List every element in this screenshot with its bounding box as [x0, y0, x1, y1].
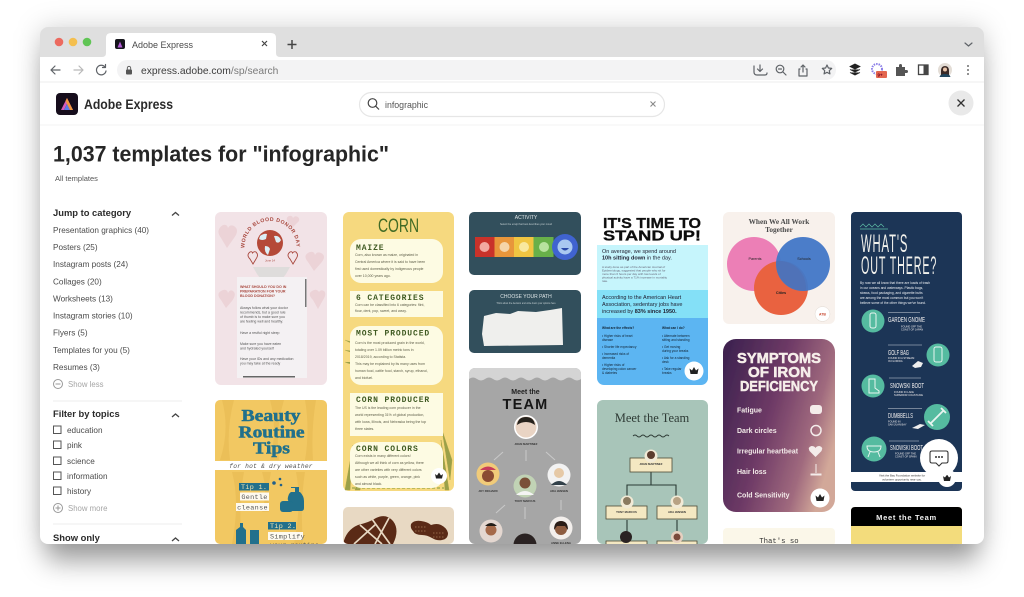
section: effects and actions: dementia: [602, 356, 615, 360]
curved title: [244, 221, 296, 252]
symptom list: [737, 405, 822, 500]
section: effects and actions: • Increased risks of: [602, 352, 629, 356]
white instruction panel: Make sure you have eaten: [240, 342, 281, 346]
venn circles: Schools: [797, 257, 811, 261]
card: meet the team grey: Meet the: [511, 389, 540, 396]
symptom list: Fatigue: [737, 408, 762, 414]
corn producer section: CORN PRODUCER: [356, 396, 430, 405]
categories section: Corn can be classified into 6 categories: flint,: [355, 303, 424, 307]
maize section: Central America where it is said to have been: [355, 260, 425, 264]
card: what's out there: [851, 212, 962, 491]
app header: [40, 90, 984, 126]
card: activity chalkboard: ACTIVITY: [515, 215, 538, 221]
section: effects and actions: disease: [602, 338, 613, 342]
maize section: first used domestically by indigenous people: [355, 267, 424, 271]
card: that's so: That's so: [759, 538, 799, 546]
filter by topics: pink: [67, 441, 83, 450]
section: sitting: more than 6 hours per day with low levels of: [602, 272, 661, 276]
june date: June 14: [265, 258, 275, 262]
corn producer section: with Iowa, Illinois, and Nebraska being the top: [355, 420, 426, 424]
white instruction panel: Have your IDs and any medication: [240, 357, 294, 361]
card: symptoms of iron deficiency: SYMPTOMS: [737, 351, 821, 367]
breadcrumb: All templates: [55, 174, 98, 183]
headline: WHAT'S: [861, 230, 908, 258]
found item list: SNOWSKI BOOT: [890, 443, 923, 452]
address bar: express.adobe.com/sp/search: [141, 66, 279, 77]
org chart: ADA JENSEN: [668, 510, 686, 514]
white instruction panel: are feeling well and healthy.: [240, 320, 283, 324]
filter by topics: [53, 408, 179, 513]
card: corn: [343, 212, 454, 491]
tip one: Tip 1.: [241, 484, 267, 492]
white instruction panel: of thumb is to make sure you: [240, 315, 285, 319]
section: sedentary jobs: increased by 83% since 1950.: [602, 309, 677, 315]
section: effects and actions: desk: [662, 360, 669, 364]
address bar: [117, 60, 836, 80]
found item list: FOUND OFF THE: [901, 324, 922, 328]
section: effects and actions: • Get moving: [662, 345, 681, 349]
jump to category: Jump to category: [53, 207, 132, 218]
found item list: FOUND IN A STREAM: [888, 356, 914, 360]
categories section: 6 CATEGORIES: [356, 294, 424, 303]
section: effects and actions: [597, 318, 708, 385]
found item list: COAST OF SPAIN: [895, 454, 917, 458]
found item list: FOUND OFF THE: [895, 452, 916, 456]
active tab: Adobe Express: [132, 40, 194, 50]
found item list: GARDEN GNOME: [888, 315, 925, 324]
most produced section: [350, 326, 443, 385]
most produced section: totaling over 1.09 billion metric tons in: [355, 348, 414, 352]
tip two: your routine: [270, 542, 319, 550]
org chart people: JOY RICHARD: [478, 489, 498, 493]
section: effects and actions: What can I do?: [662, 326, 685, 330]
show only: Show only: [53, 532, 101, 543]
most produced section: MOST PRODUCED: [356, 330, 430, 338]
categories section: flour, dent, pop, sweet, and waxy.: [355, 309, 407, 313]
forward button: [74, 66, 83, 74]
corn title: CORN: [378, 216, 419, 237]
venn circles: Parents: [748, 257, 762, 261]
tip one: Gentle: [241, 494, 268, 502]
card: choose your path: Think about the decision and write down your options here: [496, 302, 556, 305]
white instruction panel: [237, 277, 307, 378]
section: sedentary jobs: Association, sedentary jobs have: [602, 302, 682, 308]
found item list: DUMBBELLS: [888, 411, 913, 420]
card: meet the team black header: Meet the Team: [876, 513, 937, 522]
jump to category: Presentation graphics (40): [53, 226, 149, 235]
toolbar icons: 9+: [878, 72, 883, 78]
premium badge: [810, 488, 830, 508]
found item list: GOLF BAG: [888, 348, 909, 357]
logo stamp: ATB: [819, 312, 826, 316]
card: symptoms of iron deficiency: DEFICIENCY: [740, 379, 818, 395]
section: sitting: Epidemiology, suggested that people who sit for: [602, 268, 665, 272]
found item list: SAN JUAN BAY: [888, 422, 907, 426]
found item list: FOUND IN LAKE: [894, 390, 914, 394]
org chart people: ANNE ELLENA: [551, 541, 571, 545]
sidebar filters: [53, 207, 182, 543]
card: choose your path: CHOOSE YOUR PATH: [500, 294, 552, 300]
card: symptoms of iron deficiency: [723, 339, 835, 512]
tip one: [236, 478, 304, 512]
card: meet the team grey: [469, 368, 581, 556]
found item list: IN FLORIDA: [888, 359, 903, 363]
template grid: [215, 212, 962, 544]
white instruction panel: PREPARATION FOR YOUR: [240, 290, 286, 294]
org chart people: [476, 415, 572, 556]
found item list: COAST OF JAPAN: [901, 328, 923, 332]
title: Tips: [253, 438, 291, 458]
card: world blood donor day: WORLD BLOOD DONOR DAY: [240, 217, 300, 248]
org chart people: ADA JENSEN: [550, 489, 568, 493]
filter by topics: information: [67, 472, 108, 481]
found item list: [862, 310, 950, 462]
section: effects and actions: • Alternate between: [662, 334, 690, 338]
premium badge: [938, 469, 956, 487]
browser toolbar: [40, 60, 984, 82]
white instruction panel: BLOOD DONATION?: [240, 294, 275, 298]
section: effects and actions: during your breaks: [662, 349, 689, 353]
section: effects and actions: • Higher risks of: [602, 363, 624, 367]
card: choose your path: [469, 290, 581, 353]
premium badge: [684, 362, 704, 380]
card: beauty routine tips: [215, 400, 327, 550]
org chart people: JOHN MARTINEZ: [514, 442, 538, 446]
section: sitting: rate.: [602, 279, 608, 283]
jump to category: [53, 207, 179, 389]
footer band: [851, 472, 962, 482]
section: sitting: 10h sitting down in the day.: [602, 256, 672, 262]
maize section: Corn, also known as maize, originated in: [355, 253, 418, 257]
most produced section: Corn is the most produced grain in the world,: [355, 341, 425, 345]
found item list: SUPERIOR COASTLINE: [894, 393, 923, 397]
jump to category: Resumes (3): [53, 363, 100, 372]
subtitle band: [215, 461, 327, 470]
tip one: cleanse: [237, 504, 268, 512]
card: it's time to stand up: STAND UP!: [603, 228, 701, 244]
org chart: JOHN MARTINEZ: [640, 462, 663, 466]
reload button: [96, 64, 106, 75]
card: what's out there: By now we all know that there are loads of trash: [860, 281, 930, 285]
card: what's out there: straws, food packaging, and cigarette butts: [860, 291, 923, 295]
corn colors section: Corn exists in many different colors!: [355, 454, 411, 458]
most produced section: and biofuel.: [355, 376, 373, 380]
headline: [861, 230, 937, 280]
card: what's out there: in our oceans and waterways. Plastic bags,: [860, 286, 923, 290]
maize section: [350, 239, 443, 283]
symptom list: Hair loss: [737, 469, 767, 476]
card: venn diagram: Together: [765, 225, 794, 234]
tab list chevron: [965, 43, 972, 46]
white instruction panel: Always follow what your doctor: [240, 306, 289, 310]
section: sitting: On average, we spend around: [602, 249, 676, 255]
corn colors section: such as white, purple, green, orange, pink: [355, 475, 420, 479]
globe: [257, 230, 283, 256]
section: sitting: [597, 245, 708, 290]
section: effects and actions: • Ask for a standing: [662, 356, 690, 360]
headline: OUT THERE?: [861, 253, 937, 280]
active tab: [102, 33, 280, 57]
window controls: [55, 38, 91, 46]
card: symptoms of iron deficiency: OF IRON: [748, 365, 811, 381]
jump to category: Templates for you (5): [53, 346, 130, 355]
corn producer section: world representing 31% of global production,: [355, 413, 424, 417]
section: sitting: A study done as part of the American Journal of: [602, 265, 665, 269]
jump to category: Flyers (5): [53, 328, 88, 338]
corn colors section: [350, 442, 443, 488]
card: activity chalkboard: Select the emoji that best describes your mood: [500, 223, 553, 226]
search box: [360, 92, 664, 116]
tip two: Simplify: [270, 534, 305, 542]
page heading: 1,037 templates for "infographic": [53, 142, 389, 166]
corn producer section: three states.: [355, 427, 374, 431]
section: sedentary jobs: [597, 290, 708, 318]
card: meet the team black header: [851, 507, 962, 547]
jump to category: Collages (20): [53, 278, 102, 286]
tip two: Tip 2.: [270, 523, 296, 531]
filter by topics: education: [67, 426, 103, 435]
venn circles: Cities: [776, 291, 786, 295]
section: sedentary jobs: According to the American Heart: [602, 295, 682, 301]
found item list: SNOWSKI BOOT: [890, 381, 924, 390]
card: venn diagram: [723, 212, 835, 324]
card: peanut: [343, 507, 454, 544]
card: what's out there: are among the most common but you won't: [860, 296, 923, 300]
symptom list: Irregular heartbeat: [737, 448, 799, 456]
brand name: Adobe Express: [84, 96, 173, 112]
section: effects and actions: breaks: [662, 371, 672, 375]
card: world blood donor day: [215, 212, 327, 385]
section: effects and actions: • Take regular: [662, 367, 682, 371]
filter by topics: science: [67, 457, 95, 466]
toolbar icons: [754, 63, 969, 78]
white instruction panel: and hydrated yourself: [240, 346, 274, 350]
corn producer section: The US is the leading corn producer in the: [355, 406, 421, 410]
white instruction panel: WHAT SHOULD YOU DO IN: [240, 285, 287, 289]
filter by topics: Show more: [68, 504, 107, 513]
corn colors section: are other varieties with very different colors: [355, 468, 422, 472]
jump to category: Worksheets (13): [53, 294, 113, 304]
corn colors section: CORN COLORS: [356, 445, 419, 454]
section: effects and actions: • Higher risks of heart: [602, 334, 633, 338]
section: effects and actions: sitting and standing: [662, 338, 690, 342]
corn colors section: Although we all think of corn as yellow, there: [355, 461, 424, 465]
org chart people: TONY MARCUS: [515, 499, 535, 503]
white instruction panel: Have a restful night sleep: [240, 331, 280, 335]
org chart: TONY MARCUS: [616, 510, 637, 514]
venn circles: [727, 237, 830, 315]
section: effects and actions: What are the effects?: [602, 326, 634, 330]
close button: [948, 90, 974, 116]
card: it's time to stand up: [597, 212, 708, 385]
torn paper: [482, 308, 563, 346]
card: what's out there: believe some of the other things we've found.: [860, 301, 926, 305]
categories section: [350, 291, 443, 317]
section: effects and actions: • Shorter life expectancy: [602, 345, 637, 349]
jump to category: Posters (25): [53, 243, 98, 252]
tip two: [236, 522, 318, 544]
corn producer section: [350, 393, 443, 436]
card: meet the team grey: TEAM: [503, 397, 548, 413]
org chart: [606, 450, 697, 549]
title: Routine: [238, 422, 304, 442]
most produced section: 2018/2019, according to Statista.: [355, 355, 406, 359]
card: meet the team green: Meet the Team: [615, 411, 690, 425]
maize section: over 10,000 years ago.: [355, 274, 391, 278]
footer band: volunteer opportunity near you.: [882, 478, 922, 482]
search box: infographic: [385, 100, 429, 110]
white instruction panel: you may take at the ready: [240, 362, 281, 366]
card: it's time to stand up: IT'S TIME TO: [603, 216, 701, 232]
card: that's so: [723, 528, 835, 546]
card: activity chalkboard: [469, 212, 581, 275]
Adobe Express logo: [56, 93, 78, 115]
jump to category: Instagram posts (24): [53, 260, 128, 269]
premium badge: [431, 468, 447, 484]
corn colors section: and almost black.: [355, 482, 382, 486]
symptom list: Dark circles: [737, 428, 777, 435]
heart icons: [248, 252, 298, 264]
most produced section: This may be explained by its many uses from: [355, 362, 425, 366]
maize section: MAIZE: [356, 244, 385, 253]
tab strip: [40, 27, 984, 57]
back button: [51, 66, 60, 74]
title: Beauty: [242, 406, 301, 425]
mood scale: [475, 234, 578, 260]
section: sitting: physical activity have a 71% increase in mortality: [602, 276, 668, 280]
new tab button: [288, 40, 296, 49]
card: venn diagram: When We All Work: [749, 217, 810, 226]
most produced section: human food, cattle food, starch, syrup, ethanol,: [355, 369, 428, 373]
footer band: Visit the Bay Foundation website for: [879, 474, 925, 478]
section: effects and actions: developing colon cancer: [602, 367, 637, 371]
card: meet the team green: [597, 400, 708, 549]
filter by topics: Filter by topics: [53, 408, 120, 419]
show only: [53, 534, 180, 543]
section: effects and actions: & diabetes: [602, 371, 617, 375]
found item list: FOUND IN: [888, 420, 901, 424]
chat button: [920, 439, 958, 477]
jump to category: Show less: [68, 380, 104, 389]
filter by topics: history: [67, 487, 92, 496]
symptom list: Cold Sensitivity: [737, 492, 790, 500]
jump to category: Instagram stories (10): [53, 312, 133, 320]
white instruction panel: recommends, but a good rule: [240, 310, 286, 314]
subtitle band: for hot & dry weather: [229, 463, 313, 470]
